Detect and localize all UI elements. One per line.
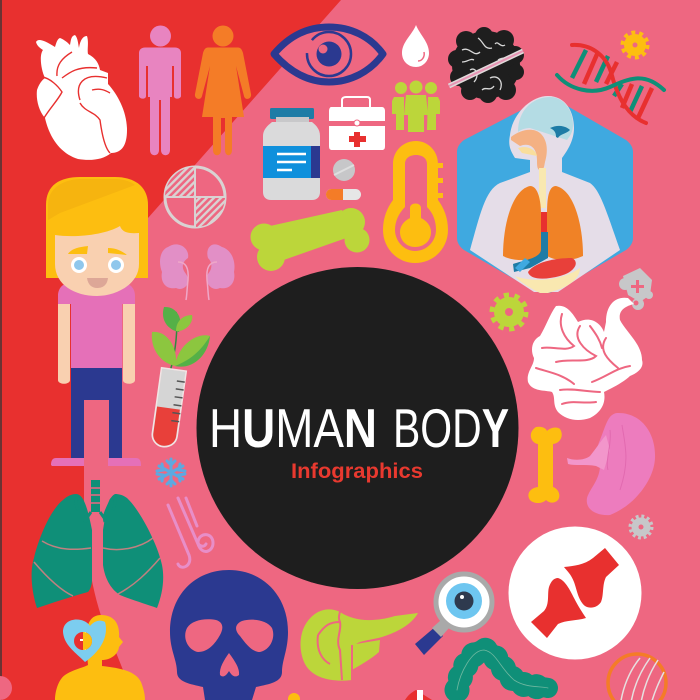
girl character	[46, 177, 148, 466]
shirt	[58, 283, 135, 368]
icon: eye	[274, 27, 383, 82]
icon: bottom yellow dome	[288, 693, 300, 700]
icon: magnifying glass	[415, 574, 492, 655]
arms	[58, 303, 135, 384]
eyebrows	[68, 246, 127, 255]
icon: yellow bone	[528, 427, 562, 503]
icon: thermometer	[383, 141, 448, 263]
icon: person with heart	[55, 615, 145, 700]
icon: wind lines	[168, 498, 213, 567]
icon: pie chart	[165, 167, 225, 227]
icon: lungs	[32, 480, 163, 608]
icon: skull	[170, 570, 288, 700]
icon: blood drop	[402, 25, 429, 67]
icon: first aid kit	[329, 97, 385, 150]
icon: plant in test tube	[151, 307, 210, 448]
eyes	[71, 257, 87, 273]
icon: bone	[250, 208, 370, 271]
shoes	[51, 458, 141, 466]
subtitle: Infographics	[291, 460, 423, 483]
icon: pancreas	[301, 600, 418, 681]
icon: DNA helix	[557, 45, 664, 123]
icon: green gear	[492, 296, 526, 328]
title: BODY	[393, 397, 509, 459]
left edge strip	[0, 0, 2, 700]
icon: heart	[36, 35, 127, 160]
icon: joint in white circle	[508, 526, 642, 660]
icon: grey gear	[630, 516, 652, 538]
icon: medicine bottle	[263, 108, 320, 200]
mouth	[87, 278, 108, 288]
icon: male figure	[139, 26, 181, 155]
hair highlight	[48, 179, 135, 220]
icon: pills	[326, 159, 361, 200]
title: HUMAN	[209, 397, 377, 459]
icon: snowflake	[157, 459, 185, 486]
red diagonal panel	[0, 0, 341, 700]
icon: intestines	[528, 298, 642, 420]
icon: kidneys	[160, 244, 234, 300]
central black circle	[196, 267, 518, 589]
hair	[46, 177, 148, 278]
icon: group of people	[392, 80, 440, 132]
icon: colon	[457, 650, 548, 690]
icon: brain in black	[448, 27, 524, 103]
title	[209, 397, 509, 459]
icon: yellow gear	[623, 33, 647, 57]
icon: spleen	[567, 413, 655, 515]
face	[55, 226, 139, 296]
corner circle	[0, 676, 12, 700]
icon: orange ring	[608, 654, 666, 700]
icon: bottom red and white shape	[405, 690, 432, 700]
icon: hexagon body diagram	[457, 96, 633, 293]
icon: grey virus	[619, 268, 653, 310]
icon: female figure	[195, 26, 251, 155]
legs	[71, 368, 122, 458]
